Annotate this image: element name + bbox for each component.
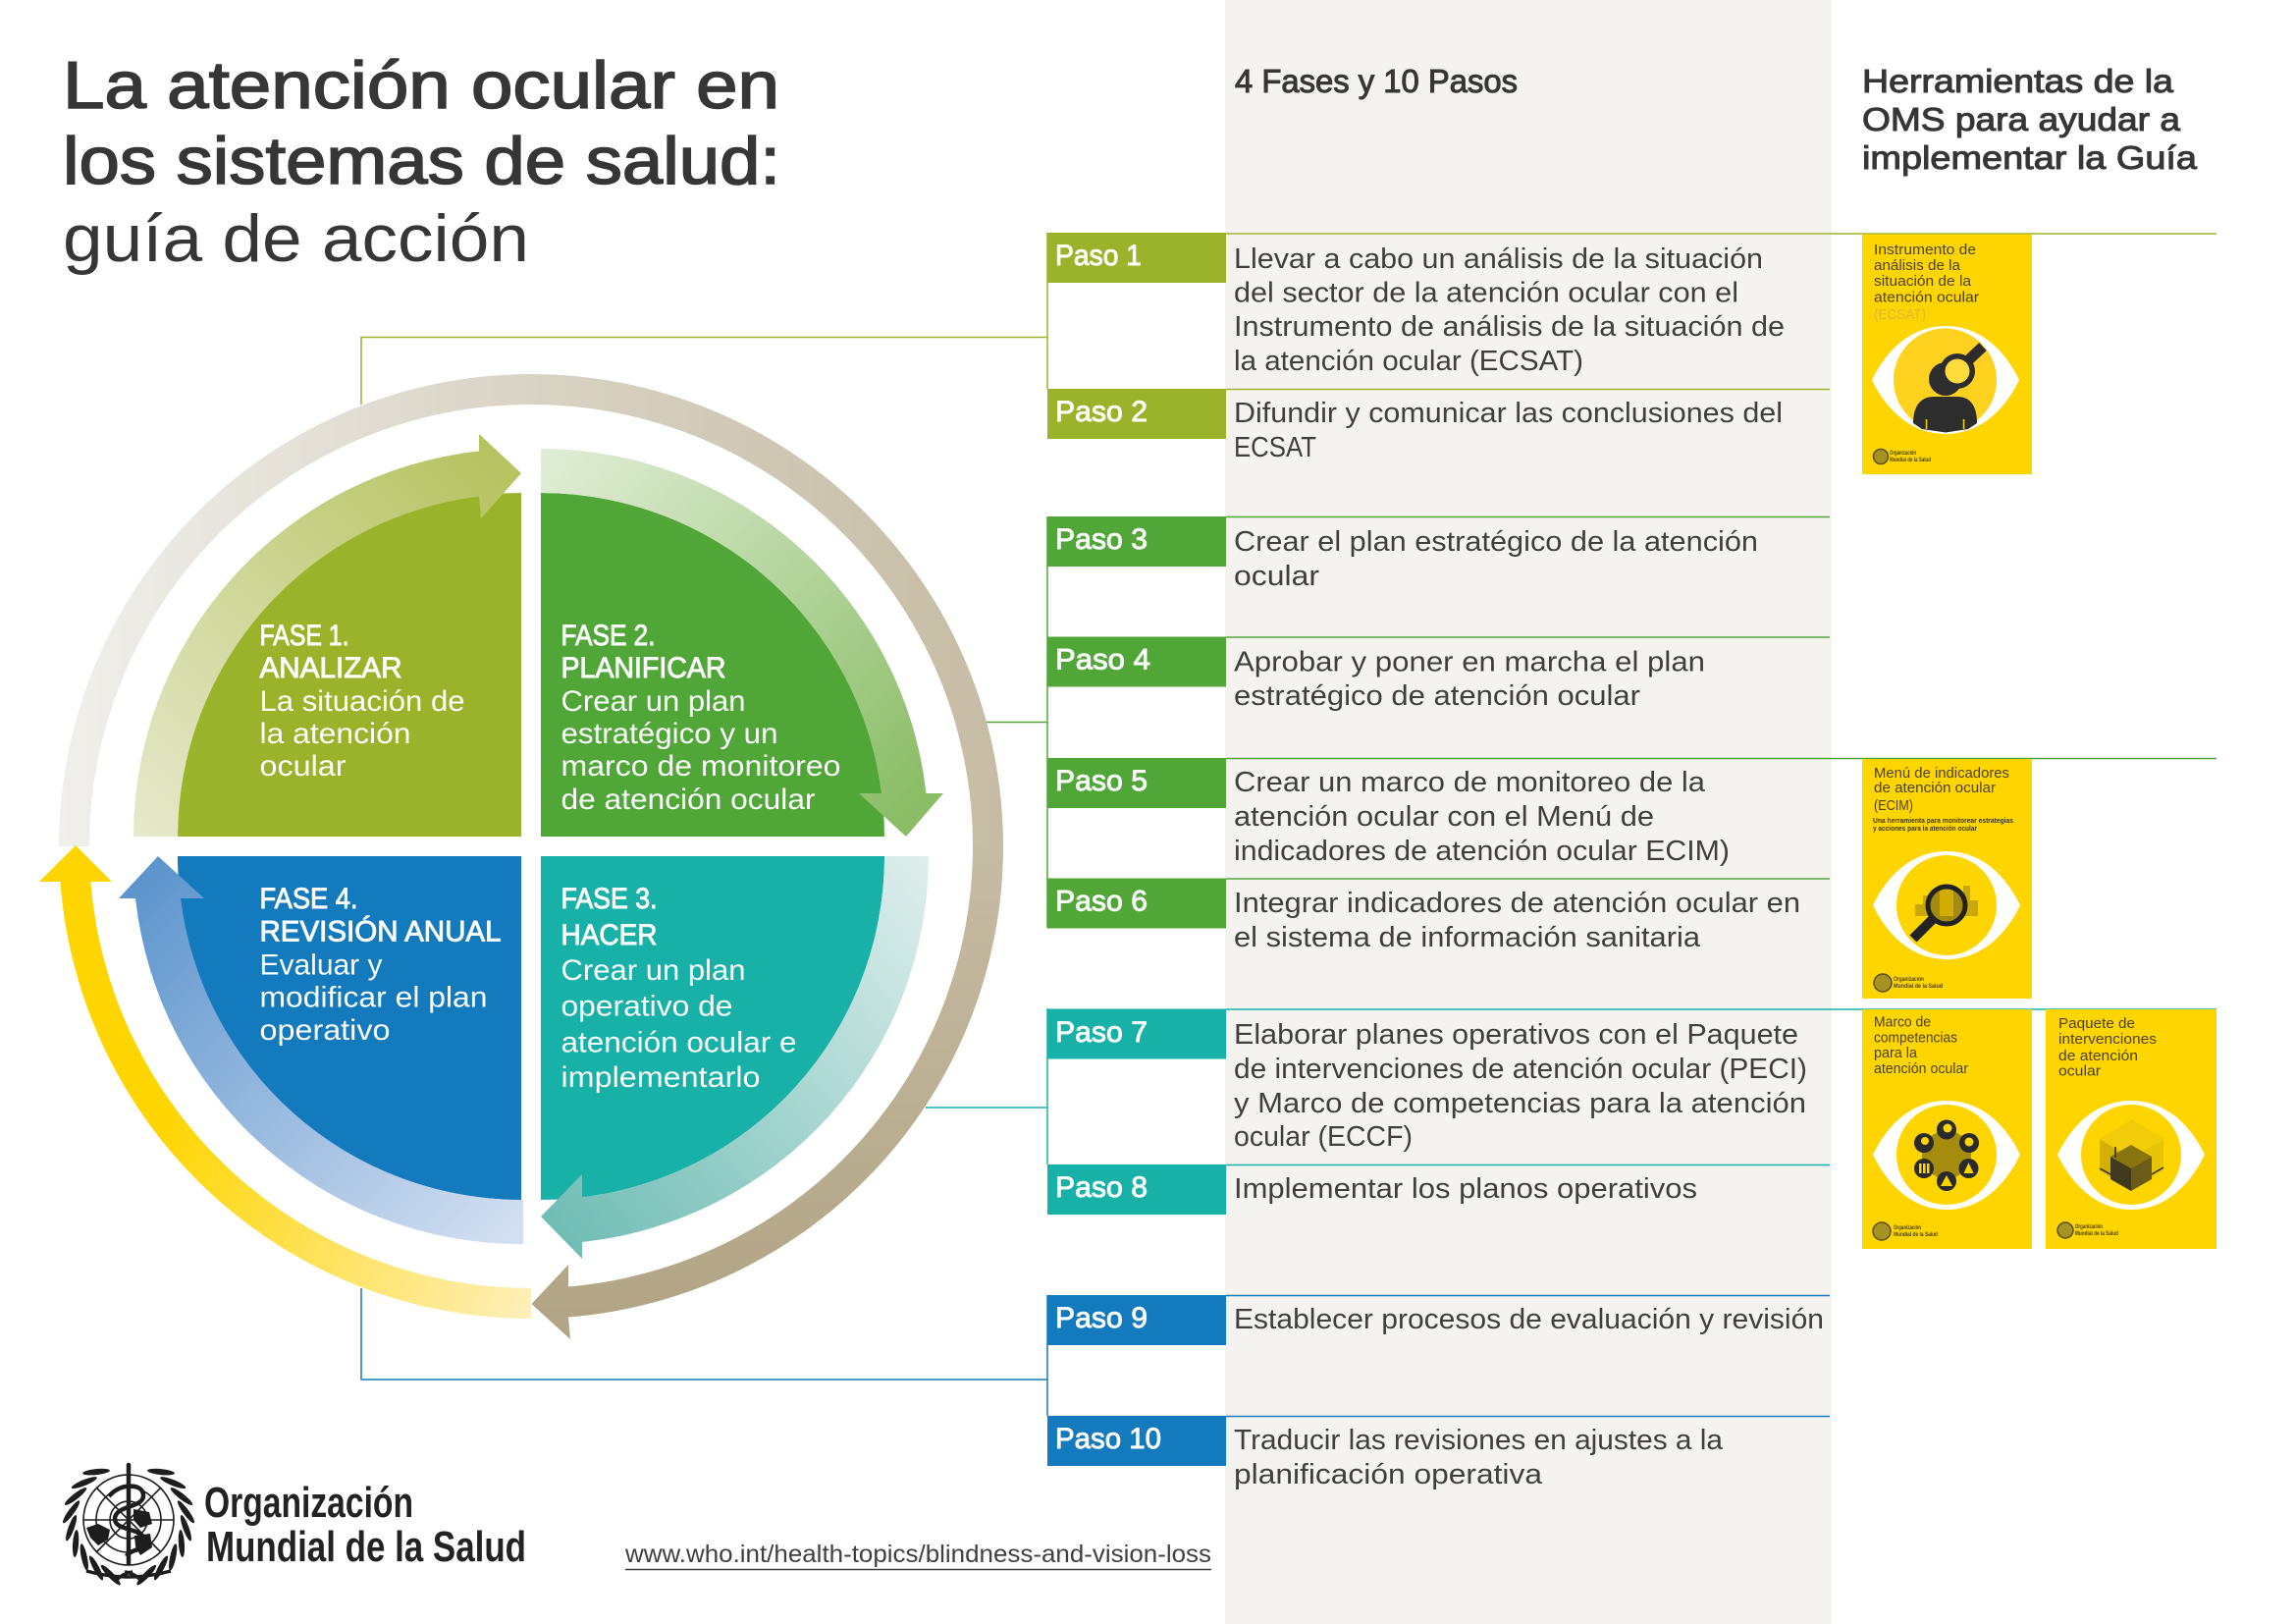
phase 3 text: HACER <box>561 919 658 951</box>
title: los sistemas de salud: <box>63 124 780 198</box>
step 1: Instrumento de análisis de la situación de <box>1234 311 1785 343</box>
phase 1 text: La situación de <box>259 685 465 718</box>
phase 4 text: Evaluar y <box>259 948 383 982</box>
heading: WHO tools: implementar la Guía <box>1862 139 2198 176</box>
step 9: Paso 9 <box>1055 1302 1148 1334</box>
tool cover: ECCF: para la <box>1874 1046 1918 1061</box>
heading: WHO tools <box>1862 63 2198 176</box>
step 1: Llevar a cabo un análisis de la situación <box>1234 244 1763 275</box>
tool cover: PECI <box>2046 1009 2216 1249</box>
step 7: Paso 7 <box>1055 1016 1148 1049</box>
step 10: Traducir las revisiones en ajustes a la <box>1234 1425 1724 1456</box>
tool cover: PECI: intervenciones <box>2058 1032 2157 1048</box>
step 3: Paso 3 <box>1055 523 1148 556</box>
WHO name <box>204 1479 526 1571</box>
phase 1 text: ANALIZAR <box>259 652 402 684</box>
phase 3 text: implementarlo <box>561 1061 760 1094</box>
tool cover: ECIM: (ECIM) <box>1874 798 1913 814</box>
connector: phase 1 to steps <box>361 233 1047 405</box>
heading: WHO tools: OMS para ayudar a <box>1862 101 2181 137</box>
phase 4 text: modificar el plan <box>259 982 487 1013</box>
tool cover: ECCF: competencias <box>1874 1031 1957 1047</box>
phase 2 text: marco de monitoreo <box>561 750 840 783</box>
icon: small WHO logo: Organización <box>1890 450 1916 457</box>
step 7 <box>1047 1009 2216 1153</box>
phase 2 text: de atención ocular <box>561 784 816 816</box>
icon: small WHO logo <box>1873 450 1931 463</box>
icon: WHO emblem <box>61 1465 196 1587</box>
step 1: la atención ocular (ECSAT) <box>1234 346 1583 377</box>
icon: eye with cube <box>2057 1101 2205 1210</box>
connector: phase 4 to steps <box>361 1288 1047 1416</box>
phase 3 text: atención ocular e <box>561 1027 797 1058</box>
tool cover: ECIM: y acciones para la atención ocular <box>1873 824 1977 833</box>
tool cover: ECIM: Menú de indicadores <box>1874 766 2009 782</box>
icon: small WHO logo: Mundial de la Salud <box>1890 457 1931 463</box>
icon: small WHO logo <box>1873 1222 1938 1240</box>
step 3: ocular <box>1234 561 1319 592</box>
icon: small WHO logo: Mundial de la Salud <box>1894 983 1943 990</box>
step 7: de intervenciones de atención ocular (PECI) <box>1234 1054 1807 1085</box>
phase 4 text: operativo <box>259 1014 391 1047</box>
phase 3 text: operativo de <box>561 990 732 1023</box>
step 1: Paso 1 <box>1055 240 1142 272</box>
icon: small WHO logo: Mundial de la Salud <box>2075 1230 2118 1237</box>
phase 1 text: ocular <box>259 750 346 783</box>
tool cover: ECSAT: (ECSAT) <box>1874 307 1926 323</box>
phase 2 text: estratégico y un <box>561 718 777 750</box>
step 5: atención ocular con el Menú de <box>1234 801 1654 833</box>
title: guía de acción <box>63 201 529 276</box>
step 4: Paso 4 <box>1055 644 1150 676</box>
cycle diagram <box>39 374 1003 1339</box>
step 6: Integrar indicadores de atención ocular en <box>1234 888 1800 919</box>
icon: small WHO logo <box>1874 974 1943 992</box>
heading: WHO tools: Herramientas de la <box>1862 63 2174 99</box>
phase 1 text: FASE 1. <box>259 620 349 652</box>
step 5 <box>1047 758 2216 867</box>
title <box>63 48 780 276</box>
phase 4 quadrant <box>119 856 523 1244</box>
panel: steps column background <box>1225 0 1832 1624</box>
title: La atención ocular en <box>63 48 779 123</box>
tool cover: ECCF: Marco de <box>1874 1015 1931 1031</box>
step 4 <box>1047 636 1830 712</box>
tool cover: ECCF <box>1862 1009 2032 1249</box>
phase 4 text: FASE 4. <box>259 883 357 915</box>
phase 1 quadrant <box>133 434 521 837</box>
phase 3 quadrant <box>541 856 929 1259</box>
step 10: planificación operativa <box>1234 1459 1543 1490</box>
step 9: Establecer procesos de evaluación y revisión <box>1234 1304 1824 1335</box>
step 2: Paso 2 <box>1055 396 1148 428</box>
step 4: estratégico de atención ocular <box>1234 680 1640 712</box>
step 6 <box>1047 878 1830 953</box>
WHO name: Organización <box>204 1479 413 1527</box>
step 10: Paso 10 <box>1055 1423 1161 1455</box>
step 2 <box>1047 389 1830 463</box>
phase 1 arrow <box>133 434 521 837</box>
icon: small WHO logo: Organización <box>1894 1224 1921 1231</box>
phase 3 text: Crear un plan <box>561 954 746 987</box>
step 7: ocular (ECCF) <box>1234 1121 1413 1153</box>
step 6: el sistema de información sanitaria <box>1234 922 1701 953</box>
phase 3 text: FASE 3. <box>561 883 658 915</box>
tool cover: ECSAT: situación de la <box>1874 274 1972 290</box>
heading: phases and steps: 4 Fases y 10 Pasos <box>1235 63 1518 99</box>
phase 2 text: FASE 2. <box>561 620 656 652</box>
connector: phase 2 to steps <box>987 516 1047 928</box>
step 1: del sector de la atención ocular con el <box>1234 277 1738 308</box>
icon: small WHO logo: Organización <box>1894 976 1924 983</box>
tool cover: PECI: de atención <box>2058 1049 2138 1064</box>
icon: eye with competency circles <box>1873 1101 2020 1210</box>
phase 2 text <box>561 620 840 816</box>
WHO logo <box>61 1465 526 1587</box>
outer ring arrow: lower half with head <box>532 846 1003 1339</box>
tool cover: ECSAT: atención ocular <box>1874 291 1979 306</box>
outer ring arrow: upper half <box>59 374 1003 846</box>
tool cover: ECCF: atención ocular <box>1874 1061 1968 1077</box>
step 7: Elaborar planes operativos con el Paquete <box>1234 1019 1798 1051</box>
phase 4 text: REVISIÓN ANUAL <box>259 915 501 948</box>
icon: small WHO logo: Mundial de la Salud <box>1894 1231 1938 1238</box>
step 8: Paso 8 <box>1055 1171 1148 1204</box>
phase 3 text <box>561 883 797 1094</box>
step 6: Paso 6 <box>1055 886 1148 917</box>
tool cover: ECIM: de atención ocular <box>1874 781 1996 796</box>
tool cover: ECSAT: análisis de la <box>1874 258 1961 274</box>
tool cover: PECI: ocular <box>2058 1064 2101 1080</box>
phase 2 arrow <box>541 449 943 837</box>
step 8: Implementar los planos operativos <box>1234 1173 1697 1205</box>
step 5: indicadores de atención ocular ECIM) <box>1234 836 1730 867</box>
phase 4 arrow <box>119 856 523 1244</box>
step 5: Crear un marco de monitoreo de la <box>1234 767 1706 798</box>
phase 2 text: PLANIFICAR <box>561 652 726 684</box>
phase 1 text <box>259 620 465 783</box>
tool cover: ECSAT <box>1862 234 2032 474</box>
step 3 <box>1047 516 1830 592</box>
connector: phase 3 to steps <box>926 1008 1047 1164</box>
tool cover: ECIM: Una herramienta para monitorear estrategias <box>1873 816 2013 825</box>
tool cover: ECIM <box>1862 759 2032 999</box>
step 4: Aprobar y poner en marcha el plan <box>1234 646 1705 677</box>
step 10 <box>1047 1416 1830 1490</box>
step 7: y Marco de competencias para la atención <box>1234 1088 1806 1119</box>
phase 4 text <box>259 883 501 1047</box>
step 2: Difundir y comunicar las conclusiones del <box>1234 398 1783 429</box>
step 9 <box>1047 1295 1830 1345</box>
step 2: ECSAT <box>1234 432 1316 463</box>
step 5: Paso 5 <box>1055 765 1148 797</box>
icon: small WHO logo: Organización <box>2075 1223 2103 1230</box>
phase 1 text: la atención <box>259 718 410 750</box>
WHO name: Mundial de la Salud <box>206 1523 526 1571</box>
step 8 <box>1047 1164 1830 1215</box>
icon: eye with person and magnifier <box>1872 326 2019 434</box>
icon: small WHO logo <box>2057 1222 2118 1238</box>
icon: eye with bar chart and magnifier <box>1873 851 2020 959</box>
step 3: Crear el plan estratégico de la atención <box>1234 526 1758 558</box>
phase 3 arrow <box>541 856 929 1259</box>
step 1 <box>1047 233 2216 377</box>
tool cover: ECSAT: Instrumento de <box>1874 243 1976 258</box>
yellow ring arrow <box>39 845 531 1319</box>
website link: www.who.int/health-topics/blindness-and-vision-loss <box>624 1541 1211 1568</box>
phase 2 text: Crear un plan <box>561 685 746 718</box>
phase 2 quadrant <box>541 449 943 837</box>
tool cover: PECI: Paquete de <box>2058 1016 2135 1032</box>
